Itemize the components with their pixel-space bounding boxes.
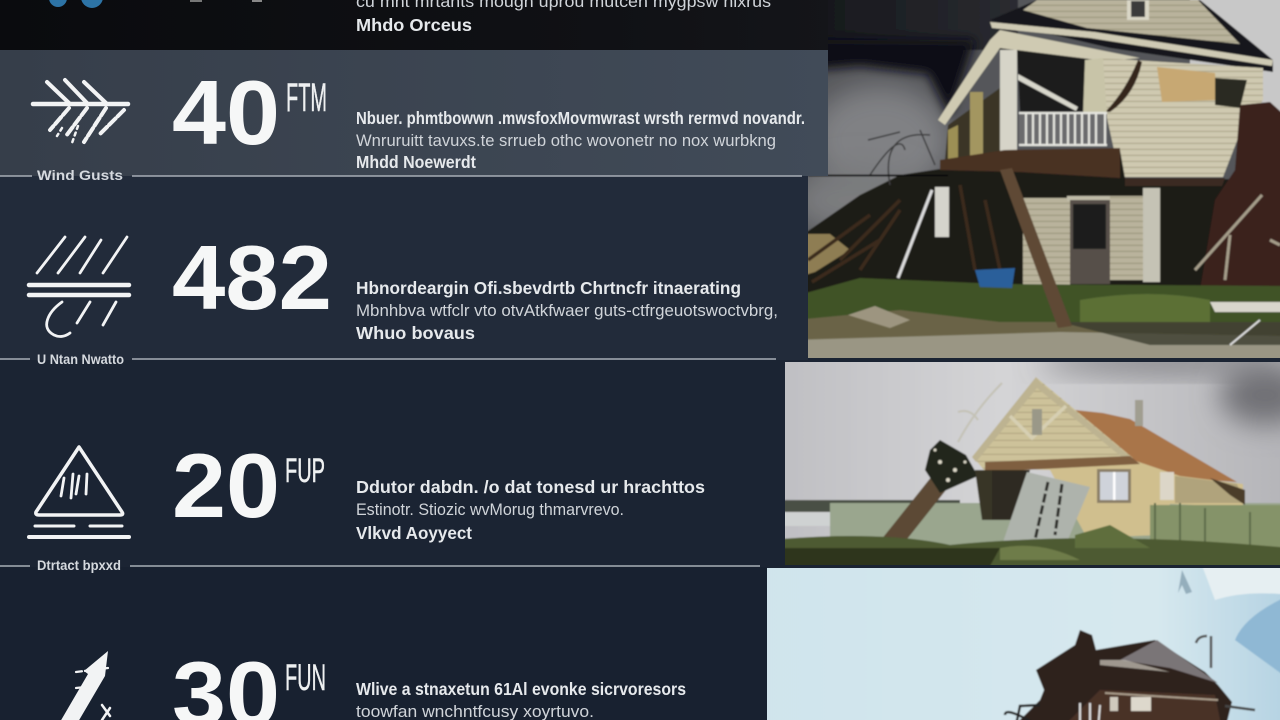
panel: row 4 debris bbox=[0, 558, 767, 720]
text: row 4 description bbox=[356, 679, 686, 720]
text: row 1 description bbox=[356, 108, 805, 172]
icon: top droplets bbox=[49, 0, 262, 8]
big number: 482: 482 bbox=[172, 228, 332, 329]
text: row 2 description: Whuo bovaus bbox=[356, 323, 475, 343]
big number: 40: 40 bbox=[172, 63, 280, 164]
text: row 2 description: Hbnordeargin Ofi.sbevdrtb Chrtncfr itnaerating bbox=[356, 278, 741, 298]
text: row 4 description: Wlive a stnaxetun 61Al evonke sicrvoresors bbox=[356, 679, 686, 699]
panel: row 3 impact bbox=[0, 352, 785, 567]
text: row 2 description: Mbnhbva wtfclr vto otvAtkfwaer guts-ctfrgeuotswoctvbrg, bbox=[356, 301, 778, 320]
text: row 1 description: Mhdd Noewerdt bbox=[356, 152, 476, 172]
icon: warning triangle bbox=[29, 447, 129, 537]
icon: debris arrow bbox=[60, 651, 110, 720]
unit: FUN: FUN bbox=[285, 657, 326, 698]
text: row 2 description bbox=[356, 278, 778, 343]
text: row 1 description: Nbuer. phmtbowwn .mwsfoxMovmwrast wrsth rermvd novandr. bbox=[356, 108, 805, 128]
label and divider: row 3: Dtrtact bpxxd bbox=[37, 558, 121, 573]
unit: FUP: FUP bbox=[285, 452, 325, 490]
photo: damaged two-storey house bbox=[790, 0, 1280, 370]
panel: row 1 wind gusts: FTM bbox=[286, 76, 327, 120]
icon: rain bars bbox=[29, 237, 129, 336]
big number: 20: 20 bbox=[172, 436, 280, 537]
text: row 3 description: Vlkvd Aoyyect bbox=[356, 523, 472, 543]
text: top description bbox=[356, 0, 771, 35]
text: row 3 description: Estinotr. Stiozic wvMorug thmarvrevo. bbox=[356, 500, 624, 519]
icon: wind and rain bbox=[33, 80, 128, 143]
text: row 1 description: Wnruruitt tavuxs.te srrueb othc wovonetr no nox wurbkng bbox=[356, 131, 776, 150]
label and divider: row 2: U Ntan Nwatto bbox=[37, 352, 124, 367]
text: top description: Mhdo Orceus bbox=[356, 15, 472, 35]
label and divider: row 1: Wind Gusts bbox=[37, 168, 123, 183]
panel: row 1 wind gusts bbox=[0, 50, 828, 176]
photo: leaning yellow house bbox=[785, 362, 1280, 565]
panel: row 2 heavy rain bbox=[0, 168, 808, 360]
text: row 3 description bbox=[356, 477, 705, 543]
text: row 3 description: Ddutor dabdn. /o dat tonesd ur hrachttos bbox=[356, 477, 705, 497]
photo: wrecked dark house against blue sky bbox=[755, 558, 1280, 720]
panel: top band bbox=[0, 0, 1010, 50]
